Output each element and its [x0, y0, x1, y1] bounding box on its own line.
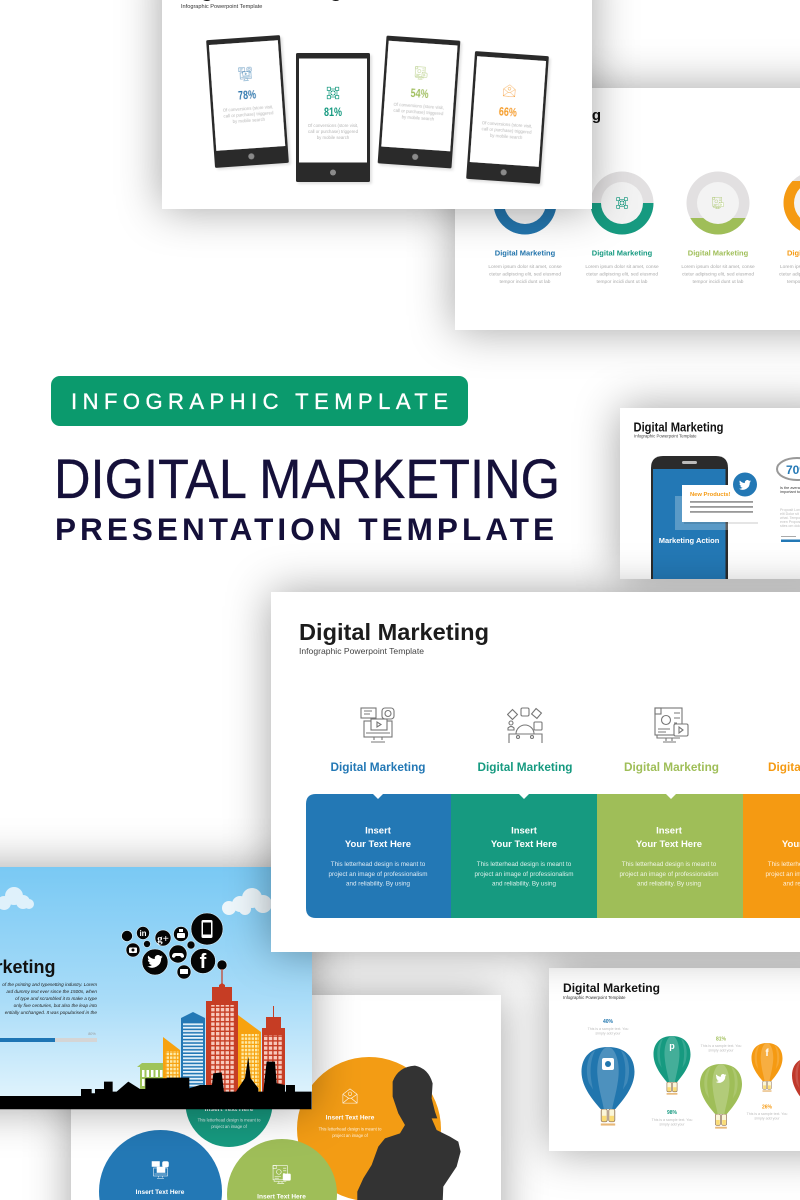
- balloon green: 81%: [716, 1036, 727, 1042]
- step bar blue: Insert: [365, 826, 392, 836]
- donut 3: [686, 172, 750, 234]
- orange circle: This letterhead design is meant to: [319, 1126, 382, 1132]
- step bar orange: [743, 794, 800, 918]
- step labels: Digital Marketing: [330, 760, 426, 774]
- step bar lime: and reliability. By using: [637, 880, 701, 888]
- balloon green: [700, 1036, 742, 1129]
- donut captions: Lorem ipsum dolor sit amet, conse: [585, 264, 659, 270]
- phone 2: 81%: call or purchase) triggered: [308, 129, 359, 134]
- teal circle: [186, 1060, 272, 1147]
- orange building right: [238, 1015, 261, 1098]
- balloon blue: [582, 1019, 634, 1126]
- donut captions: Digital Marketing: [592, 248, 653, 258]
- balloon orange: simply add your: [754, 1116, 780, 1120]
- italic body text: of the printing and typesetting industry. Lorem: [2, 982, 97, 987]
- phone 1: 78%: Of conversions (store visit,: [223, 104, 273, 113]
- step bar green: This letterhead design is meant to: [477, 861, 572, 868]
- step labels: Digital Marketing: [624, 760, 719, 774]
- step bar blue: This letterhead design is meant to: [331, 861, 426, 868]
- balloon green: This is a sample text. You: [701, 1044, 741, 1048]
- donut 1: [494, 209, 556, 234]
- badge: infographic template: INFOGRAPHIC TEMPLATE: [71, 389, 448, 414]
- phone 4: 66%: [466, 51, 549, 184]
- phone 1: 78%: 78%: [238, 87, 257, 103]
- step bar green: project an image of professionalism: [474, 871, 574, 878]
- orange circle: Insert Text Here: [326, 1114, 375, 1122]
- balloon orange: f: [765, 1048, 769, 1059]
- balloon teal: simply add your: [659, 1122, 685, 1126]
- twitter badge: [733, 472, 757, 496]
- orange circle: project an image of: [332, 1133, 369, 1138]
- phone 4: 66%: by mobile search: [490, 133, 523, 140]
- smartphone: [651, 456, 728, 579]
- social icons: in: [139, 929, 147, 938]
- balloon teal: p: [669, 1041, 675, 1051]
- step bar green: Insert: [511, 826, 538, 836]
- slide title: Digital Marketing: [634, 420, 724, 434]
- slide subtitle: Infographic Powerpoint Template: [563, 995, 626, 1000]
- phone 3: 54%: call or purchase) triggered: [393, 108, 444, 116]
- balloon blue: This is a sample text. You: [588, 1027, 628, 1031]
- balloon teal: 98%: [667, 1110, 678, 1116]
- balloon orange: 26%: [762, 1104, 773, 1110]
- balloon orange: [747, 1043, 787, 1120]
- 70 percent callout: elit Dolor sit: [780, 512, 799, 516]
- italic body text: [2, 982, 97, 1015]
- main heading: DIGITAL MARKETING: [54, 447, 560, 510]
- right cloud: [222, 888, 272, 915]
- slide subtitle: Infographic Powerpoint Template: [634, 434, 697, 438]
- step bar lime: [597, 794, 743, 918]
- notification card: [682, 485, 758, 524]
- progress bar: 80%: [88, 1032, 96, 1036]
- step bar lime: project an image of professionalism: [619, 871, 719, 878]
- black skyline silhouette: [0, 1057, 312, 1109]
- donut captions: [488, 248, 800, 285]
- phone 1: 78%: call or purchase) triggered: [223, 110, 274, 119]
- phone 4: 66%: call or purchase) triggered: [482, 126, 532, 135]
- donut captions: Lorem ipsum dolor sit amet, conse: [488, 264, 562, 270]
- donut captions: tempor incidi dunt ut lab: [693, 279, 744, 285]
- phone 1: 78%: by mobile search: [232, 117, 266, 124]
- phone 3: 54%: by mobile search: [402, 114, 435, 122]
- teal circle: This letterhead design is meant to: [198, 1118, 261, 1122]
- phone 3: 54%: Of conversions (store visit,: [393, 102, 444, 110]
- step bar lime: This letterhead design is meant to: [622, 861, 717, 868]
- phone 2: 81%: [296, 53, 370, 182]
- donut captions: Digital Marketing: [688, 248, 749, 258]
- blue building: [181, 1012, 205, 1096]
- woman silhouette: [357, 1066, 461, 1200]
- step labels: [330, 760, 800, 774]
- balloon orange: This is a sample text. You: [747, 1112, 787, 1116]
- balloon teal: This is a sample text. You: [652, 1118, 692, 1122]
- panel: process steps slide: [271, 592, 800, 952]
- teal circle: Insert Text Here: [205, 1106, 254, 1113]
- slide title: Digital Marketing: [299, 619, 489, 645]
- social icons: g+: [157, 933, 169, 945]
- slide subtitle: Infographic Powerpoint Template: [299, 646, 424, 656]
- icon: monitor: [361, 708, 394, 742]
- antenna: [221, 969, 223, 987]
- balloon blue: 40%: [603, 1019, 614, 1025]
- balloon red: [792, 1058, 800, 1102]
- green circle: [227, 1139, 337, 1200]
- slide title: Digital Marketing: [563, 981, 660, 995]
- panel: smart city skyline slide: [0, 867, 312, 1109]
- orange circle: [297, 1057, 441, 1200]
- phone 3: 54%: 54%: [410, 86, 429, 101]
- italic body text: only five centuries, but also the leap into: [14, 1003, 97, 1008]
- italic body text: ard dummy text ever since the 1500s, when: [6, 989, 97, 994]
- phone 3: 54%: [378, 36, 460, 168]
- left cloud: [0, 887, 34, 910]
- step bar green: Your Text Here: [491, 839, 557, 850]
- donut captions: ctetur adipiscing elit, sed eiusmod: [682, 272, 754, 278]
- progress bar: [0, 1032, 97, 1042]
- step bar lime: Insert: [656, 826, 683, 836]
- icon: web page: [655, 708, 688, 742]
- donut captions: Digital Marketing: [495, 248, 556, 258]
- donut 2: [590, 172, 654, 234]
- blue circle: [99, 1130, 222, 1200]
- panel: donut charts slide: [455, 88, 800, 330]
- donut 4: [784, 176, 800, 231]
- panel: mobile statistics slide: [162, 0, 592, 209]
- step bar lime: Your Text Here: [636, 839, 702, 850]
- step bar green: [451, 794, 597, 918]
- step bar blue: and reliability. By using: [346, 880, 410, 888]
- phone 2: 81%: by mobile search: [317, 135, 350, 140]
- italic body text: of type and scrambled it to make a type: [15, 996, 97, 1001]
- translucent backing card: [675, 496, 748, 530]
- red tower right: [262, 1006, 285, 1094]
- 70 percent callout: important to: [780, 490, 800, 494]
- step bar blue: project an image of professionalism: [328, 871, 428, 878]
- phone 4: 66%: 66%: [498, 104, 518, 120]
- phone 2: 81%: Of conversions (store visit,: [308, 123, 358, 128]
- blue circle: Insert Text Here: [136, 1189, 185, 1196]
- step bar green: and reliability. By using: [492, 880, 556, 888]
- slide title fragment: Digital Marketing: [480, 107, 601, 124]
- phone 1: 78%: [206, 35, 289, 168]
- social icons: [129, 920, 212, 974]
- social icons: f: [200, 951, 207, 973]
- phone 2: 81%: 81%: [324, 105, 342, 119]
- social network bubbles: [122, 913, 227, 979]
- teal circle: project an image of: [211, 1124, 248, 1129]
- green building: [137, 1063, 166, 1095]
- balloon green: simply add your: [708, 1048, 734, 1052]
- phone 4: 66%: Of conversions (store visit,: [482, 120, 532, 129]
- badge: infographic template: [51, 376, 468, 426]
- icon: people network: [508, 708, 542, 743]
- step bar blue: [306, 794, 451, 918]
- donut captions: tempor incidi dunt ut lab: [597, 279, 648, 285]
- marketing action label: Marketing Action: [659, 536, 720, 545]
- red tower main: [206, 983, 238, 1097]
- panel: phone marketing action slide: [620, 408, 800, 579]
- balloon teal: [652, 1036, 692, 1126]
- panel: hot air balloons slide: [549, 968, 800, 1151]
- sub heading: PRESENTATION TEMPLATE: [55, 511, 554, 547]
- panel: circles slide with silhouette: [71, 995, 501, 1200]
- orange building left: [163, 1037, 180, 1096]
- notification card: New Products!: [690, 492, 731, 498]
- balloon blue: simply add your: [595, 1032, 621, 1036]
- step labels: Digital Marketing: [478, 760, 572, 774]
- donut captions: ctetur adipiscing elit, sed eiusmod: [489, 272, 561, 278]
- donut captions: Lorem ipsum dolor sit amet, conse: [681, 264, 755, 270]
- italic body text: entially unchanged. It was popularised in the: [5, 1010, 97, 1015]
- slide subtitle: Infographic Powerpoint Template: [181, 4, 262, 10]
- donut captions: tempor incidi dunt ut lab: [500, 279, 551, 285]
- 70 percent callout: [777, 458, 800, 542]
- donut captions: ctetur adipiscing elit, sed eiusmod: [586, 272, 658, 278]
- step bar blue: Your Text Here: [345, 839, 411, 850]
